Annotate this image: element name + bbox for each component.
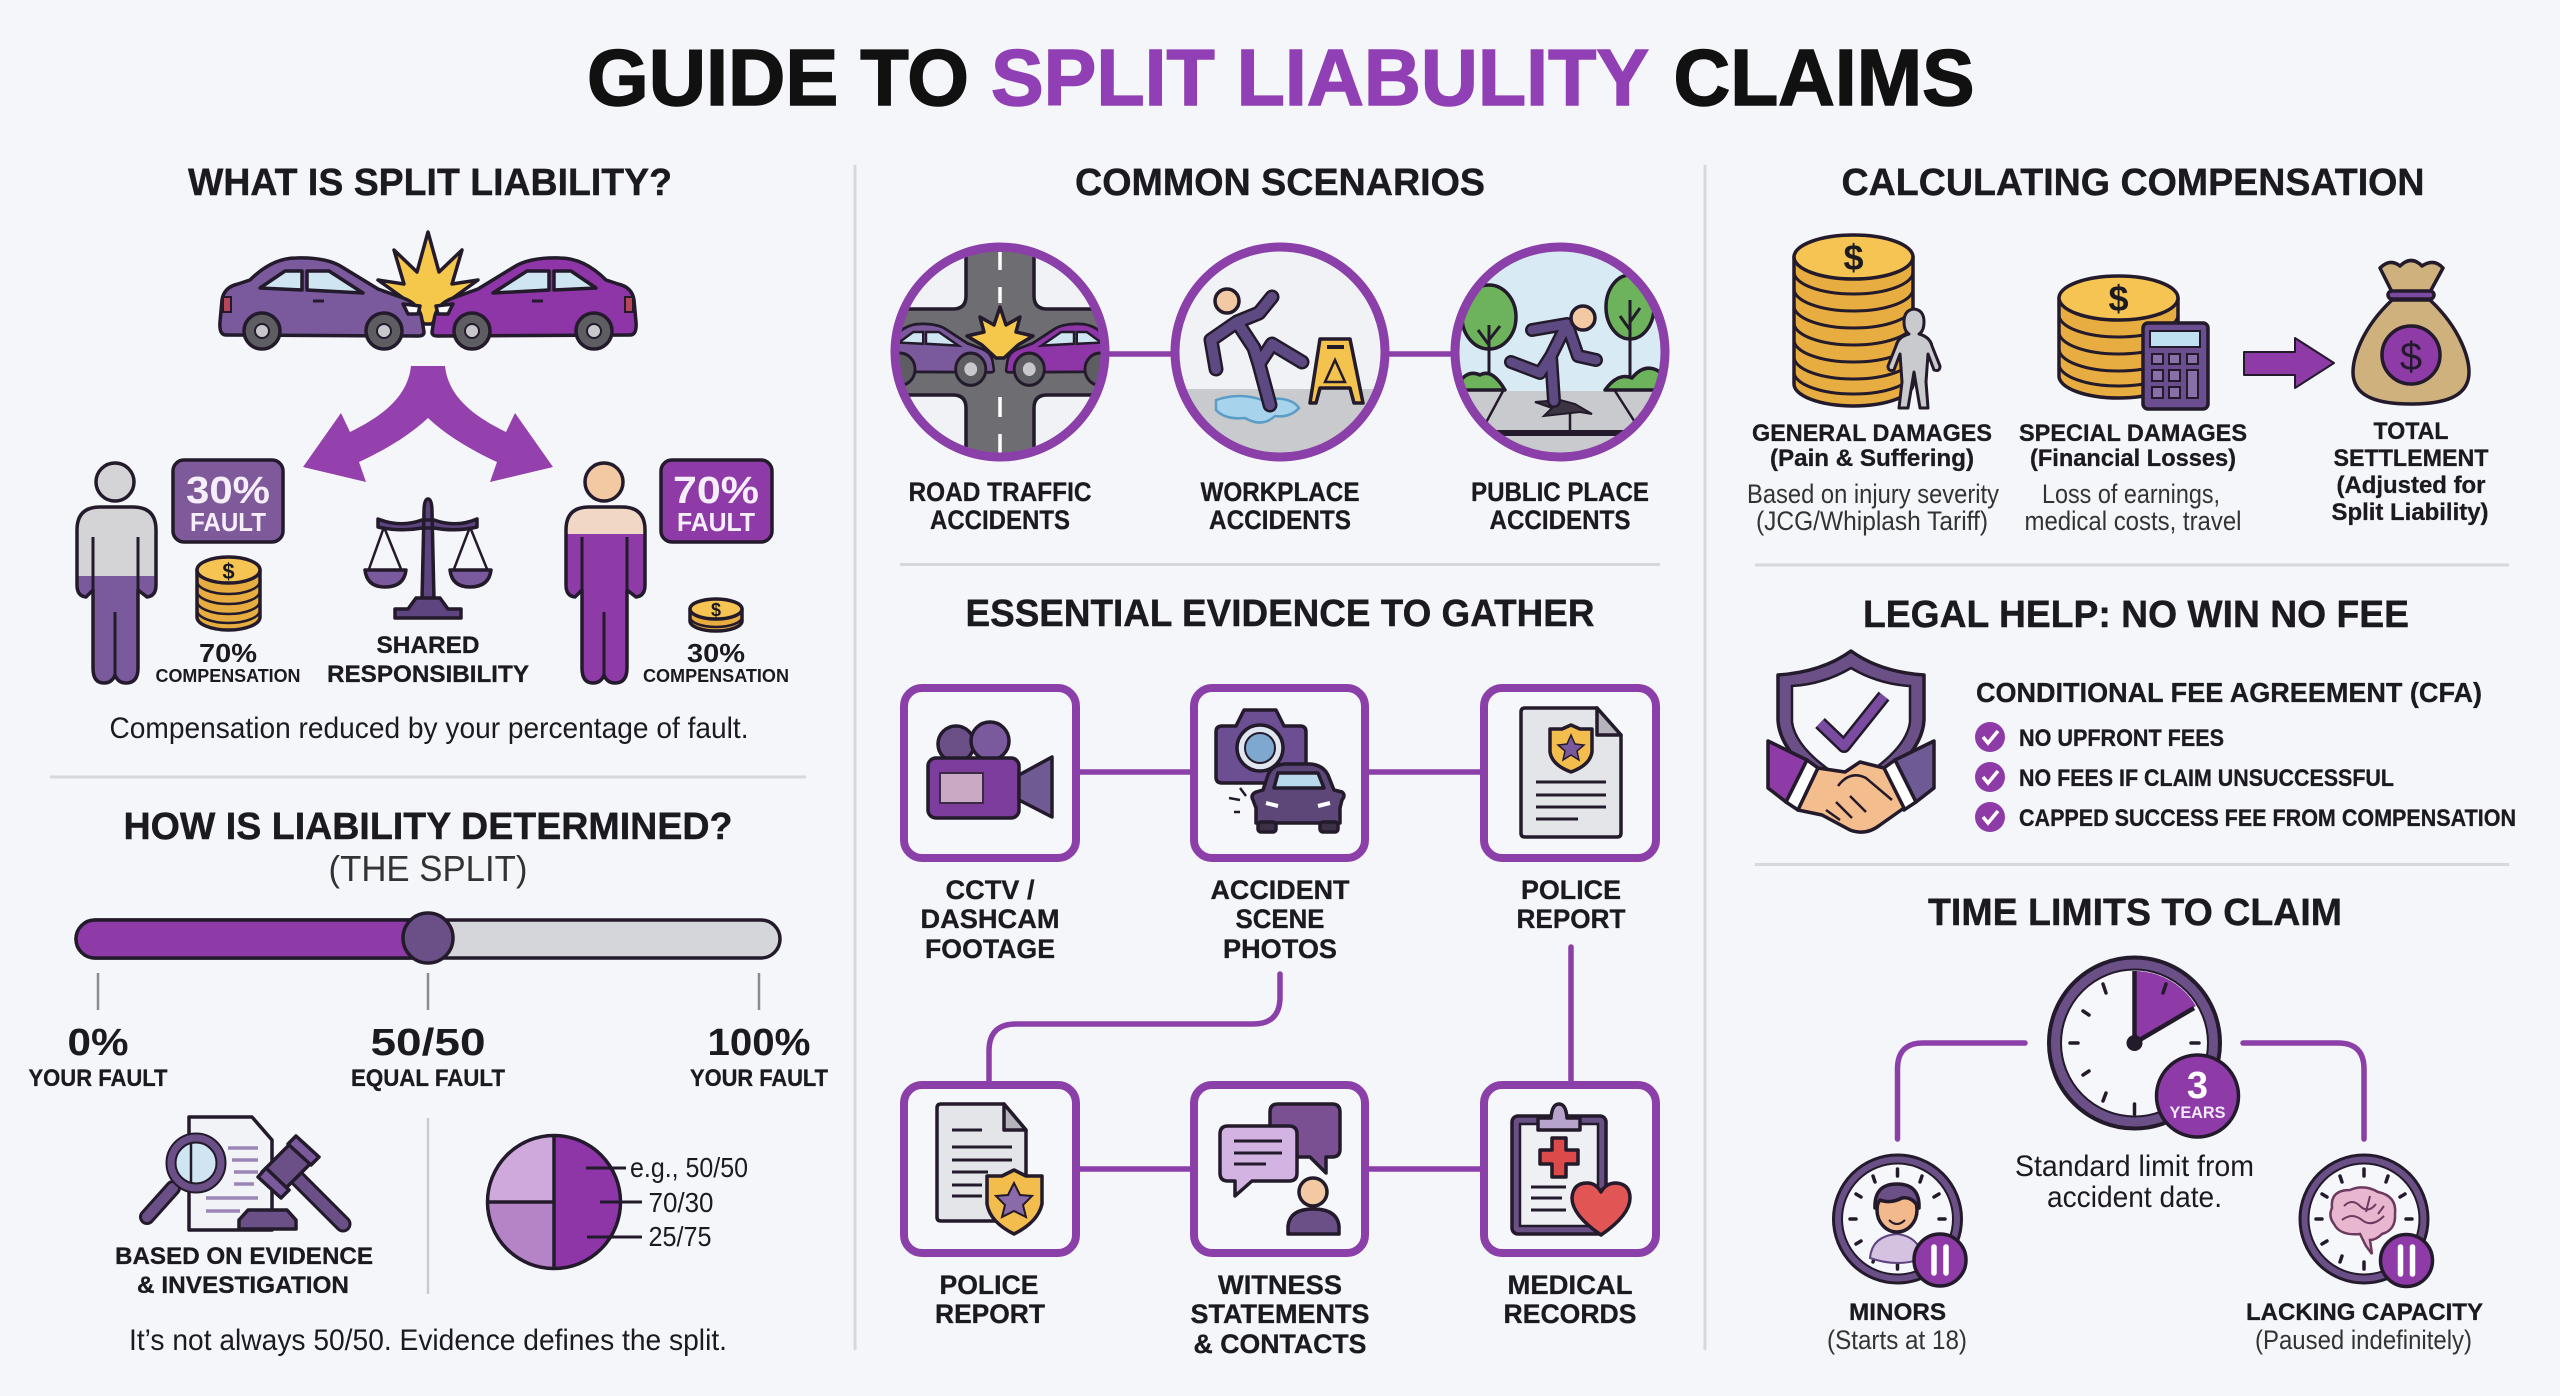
icon: coin stack small <box>690 599 742 631</box>
icon: coin stack small: $ <box>711 600 721 620</box>
text: total settlement <box>2332 418 2489 526</box>
badge: 70 percent fault: 70% <box>673 470 759 512</box>
badge: 3 years <box>2156 1055 2238 1137</box>
arrow: to total settlement <box>2244 338 2334 388</box>
label: shared responsibility <box>327 632 529 688</box>
slider: fault scale <box>76 913 780 1010</box>
label: medical records: RECORDS <box>1504 1299 1636 1329</box>
label: road traffic accidents: ROAD TRAFFIC <box>908 477 1092 507</box>
icon: right car <box>432 258 636 349</box>
text: standard limit: accident date. <box>2047 1181 2222 1214</box>
icon box: witness statements <box>1194 1085 1365 1253</box>
title: CLAIMS <box>1674 33 1974 122</box>
label: accident scene photos: ACCIDENT <box>1210 875 1350 905</box>
heading: how is liability determined <box>124 806 732 889</box>
heading: how is liability determined: (THE SPLIT) <box>328 848 528 889</box>
label: accident scene photos <box>1210 875 1350 964</box>
icon: road traffic accident <box>890 242 1110 462</box>
icon: workplace slip <box>1170 242 1390 462</box>
label: witness statements and contacts: WITNESS <box>1218 1270 1342 1300</box>
title: SPLIT LIABULITY <box>991 33 1649 122</box>
heading: calculating compensation: CALCULATING COMPENSATION <box>1842 162 2424 204</box>
icon: general damages coin stack <box>1794 235 1913 406</box>
panel: common scenarios <box>876 162 1670 535</box>
label: 0 percent <box>28 1022 168 1092</box>
heading: legal help: LEGAL HELP: NO WIN NO FEE <box>1863 594 2409 636</box>
label: public place accidents: PUBLIC PLACE <box>1471 477 1649 507</box>
label: 0 percent: 0% <box>68 1022 128 1064</box>
icon: collision star <box>378 232 478 324</box>
label: based on evidence: BASED ON EVIDENCE <box>115 1243 373 1270</box>
text: special damages: Loss of earnings, <box>2042 479 2220 509</box>
label: 30 percent compensation: 30% <box>687 638 745 668</box>
label: cctv dashcam footage: DASHCAM <box>920 904 1060 934</box>
label: 70 percent compensation <box>156 638 300 686</box>
text: general damages <box>1747 420 1999 536</box>
title <box>587 33 1974 122</box>
icon: calculator <box>2143 323 2208 409</box>
label: 50/50: 50/50 <box>370 1022 486 1064</box>
label: police report top: POLICE <box>1521 875 1621 905</box>
caption: not always 50/50: It’s not always 50/50. Evidence defines the split. <box>129 1324 727 1357</box>
label: police report bottom: POLICE <box>940 1270 1038 1300</box>
heading: essential evidence: ESSENTIAL EVIDENCE TO GATHER <box>966 593 1594 635</box>
text: special damages: medical costs, travel <box>2024 506 2242 536</box>
icon: injured person <box>1888 309 1940 408</box>
icon: money bag: $ <box>2400 335 2422 379</box>
icon: lacking capacity clock <box>2304 1159 2424 1279</box>
badge: 30 percent fault <box>173 460 283 542</box>
icon: special damages coin stack <box>2059 276 2178 398</box>
text: special damages: SPECIAL DAMAGES <box>2019 420 2247 447</box>
arrow: split arrows <box>303 366 553 482</box>
label: minors <box>1827 1299 1967 1355</box>
panel: how is liability determined <box>28 806 828 1357</box>
icon: public place trip <box>1450 247 1670 470</box>
heading: time limits: TIME LIMITS TO CLAIM <box>1928 892 2342 934</box>
text: general damages: (Pain & Suffering) <box>1770 445 1974 472</box>
label: 100 percent: YOUR FAULT <box>690 1065 828 1092</box>
icon: scales of justice <box>365 499 491 618</box>
text: cfa heading: CONDITIONAL FEE AGREEMENT (CFA) <box>1976 677 2482 708</box>
text: special damages: (Financial Losses) <box>2030 445 2236 472</box>
label: cctv dashcam footage: CCTV / <box>946 875 1035 905</box>
label: road traffic accidents: ACCIDENTS <box>930 505 1070 535</box>
chart: fault split pie: 70/30 <box>648 1187 714 1218</box>
panel: calculating compensation <box>1747 162 2489 536</box>
icon: coin stack large: $ <box>222 559 235 584</box>
icon box: scene photos <box>1194 688 1365 858</box>
icon: evidence and gavel <box>147 1117 343 1230</box>
label: lacking capacity: LACKING CAPACITY <box>2246 1299 2483 1326</box>
label: accident scene photos: SCENE <box>1236 904 1324 934</box>
icon box: cctv camera <box>904 688 1076 858</box>
label: lacking capacity: (Paused indefinitely) <box>2255 1325 2472 1355</box>
label: lacking capacity <box>2246 1299 2483 1355</box>
text: general damages: (JCG/Whiplash Tariff) <box>1756 506 1988 536</box>
label: 70 percent compensation: 70% <box>199 638 257 668</box>
panel: time limits <box>1827 892 2483 1355</box>
label: public place accidents <box>1471 477 1649 535</box>
label: 100 percent <box>690 1022 828 1092</box>
text: total settlement: (Adjusted for <box>2336 472 2486 499</box>
icon: general damages coin stack: $ <box>1843 237 1864 278</box>
heading: how is liability determined: HOW IS LIABILITY DETERMINED? <box>124 806 732 848</box>
label: police report bottom <box>935 1270 1045 1329</box>
label: witness statements and contacts: STATEMENTS <box>1190 1299 1370 1329</box>
icon box: medical records <box>1484 1085 1656 1253</box>
badge: pause minors <box>1914 1234 1966 1286</box>
text: total settlement: SETTLEMENT <box>2334 445 2489 472</box>
badge: 30 percent fault: FAULT <box>190 507 266 537</box>
label: medical records <box>1504 1270 1636 1329</box>
label: shared responsibility: SHARED <box>376 632 480 659</box>
label: witness statements and contacts: & CONTACTS <box>1194 1329 1366 1359</box>
text: standard limit: Standard limit from <box>2015 1150 2254 1183</box>
icon box: police report <box>1484 688 1656 858</box>
label: 30 percent compensation: COMPENSATION <box>643 666 789 686</box>
label: workplace accidents: WORKPLACE <box>1200 477 1360 507</box>
icon: special damages coin stack: $ <box>2108 278 2129 319</box>
title: GUIDE TO <box>587 33 969 122</box>
heading: what is split liability: WHAT IS SPLIT LIABILITY? <box>188 162 672 204</box>
label: workplace accidents: ACCIDENTS <box>1209 505 1351 535</box>
label: accident scene photos: PHOTOS <box>1223 934 1337 964</box>
label: cctv dashcam footage <box>920 875 1060 964</box>
label: 50/50: EQUAL FAULT <box>351 1065 505 1092</box>
icon: minors clock <box>1838 1159 1958 1279</box>
text: general damages: GENERAL DAMAGES <box>1752 420 1992 447</box>
icon: person 70 percent fault <box>566 463 645 683</box>
chart: fault split pie: e.g., 50/50 <box>630 1152 748 1183</box>
panel: legal help <box>1768 594 2516 832</box>
icon: left car <box>220 258 424 349</box>
icon box: police report with badge <box>904 1085 1076 1253</box>
label: 70 percent compensation: COMPENSATION <box>156 666 300 686</box>
list item: no upfront fees: NO UPFRONT FEES <box>2019 725 2224 752</box>
label: police report top: REPORT <box>1516 904 1626 934</box>
text: total settlement: Split Liability) <box>2332 499 2488 526</box>
label: medical records: MEDICAL <box>1508 1270 1632 1300</box>
label: road traffic accidents <box>908 477 1092 535</box>
text: total settlement: TOTAL <box>2374 418 2448 445</box>
icon: money bag <box>2353 260 2469 404</box>
panel: essential evidence <box>904 593 1656 1359</box>
list item: capped success fee: CAPPED SUCCESS FEE FROM COMPENSATION <box>2019 805 2516 832</box>
chart: fault split pie: 25/75 <box>648 1221 712 1252</box>
caption: compensation reduced: Compensation reduced by your percentage of fault. <box>110 712 748 745</box>
label: cctv dashcam footage: FOOTAGE <box>925 934 1055 964</box>
text: standard limit <box>2015 1150 2254 1214</box>
icon: person 30 percent fault <box>77 463 156 683</box>
icon: coin stack large <box>197 557 260 630</box>
list item: no upfront fees <box>1975 722 2224 752</box>
badge: 70 percent fault: FAULT <box>677 507 755 537</box>
label: based on evidence <box>115 1243 373 1299</box>
label: police report bottom: REPORT <box>935 1299 1045 1329</box>
label: 0 percent: YOUR FAULT <box>28 1065 168 1092</box>
icon: three year clock <box>2054 963 2214 1123</box>
list item: no fees if unsuccessful: NO FEES IF CLAIM UNSUCCESSFUL <box>2019 765 2394 792</box>
label: based on evidence: & INVESTIGATION <box>137 1272 349 1299</box>
label: 30 percent compensation <box>643 638 789 686</box>
icon: shield and handshake <box>1768 651 1934 832</box>
text: general damages: Based on injury severity <box>1747 479 1999 509</box>
panel: what is split liability <box>77 162 789 745</box>
badge: 30 percent fault: 30% <box>186 470 270 512</box>
label: 50/50 <box>351 1022 505 1092</box>
heading: common scenarios: COMMON SCENARIOS <box>1075 162 1485 204</box>
label: minors: (Starts at 18) <box>1827 1325 1967 1355</box>
label: shared responsibility: RESPONSIBILITY <box>327 661 529 688</box>
label: minors: MINORS <box>1849 1299 1946 1326</box>
label: public place accidents: ACCIDENTS <box>1490 505 1630 535</box>
label: 100 percent: 100% <box>708 1022 810 1064</box>
label: police report top <box>1516 875 1626 934</box>
badge: pause capacity <box>2380 1234 2432 1286</box>
chart: fault split pie <box>488 1135 748 1269</box>
badge: 70 percent fault <box>661 460 772 542</box>
label: witness statements and contacts <box>1190 1270 1370 1359</box>
label: workplace accidents <box>1200 477 1360 535</box>
badge: 3 years: YEARS <box>2170 1103 2226 1122</box>
text: special damages <box>2019 420 2247 536</box>
badge: 3 years: 3 <box>2187 1065 2208 1107</box>
